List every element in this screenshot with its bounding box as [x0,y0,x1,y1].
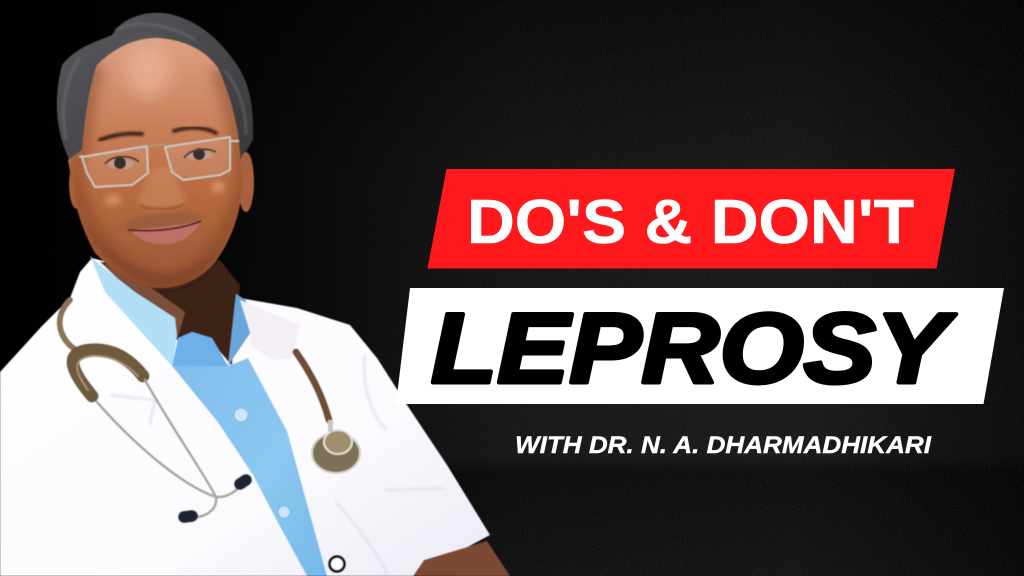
shirt collar left [90,256,177,366]
presenter credit: WITH DR. N. A. DHARMADHIKARI [515,432,932,459]
ear tip lower [184,516,192,517]
mouth [128,221,201,244]
face edge shading [76,65,243,288]
shirt button upper [234,408,248,422]
forearm [413,541,510,576]
hair [57,13,253,165]
eyebrows [100,128,216,140]
tubing right [296,352,329,420]
white lab coat [0,258,490,576]
face [68,38,243,288]
neck [100,260,240,366]
hair streaks [63,24,246,140]
coat button [330,556,344,572]
shirt placket [172,340,327,576]
eyes [105,148,216,169]
forehead highlight [126,46,170,98]
coat shadows [110,355,445,576]
shirt button lower [278,506,290,518]
tubing left [60,300,76,350]
mustache shadow [122,212,205,232]
red banner [428,169,955,268]
cheek highlights [105,181,225,206]
white banner [396,288,1004,404]
ear left [69,161,85,209]
nose [138,165,186,210]
stethoscope chest piece [312,420,360,473]
glasses [79,137,239,187]
shirt collar right [228,294,251,366]
nose base [140,204,184,209]
heading: leprosy: LEPROSY [431,292,957,404]
ear right [238,152,254,212]
ear tip upper [240,480,246,484]
doctor portrait [0,13,510,576]
stethoscope [60,300,329,517]
shirt collar under fold [172,332,228,366]
heading: do's and don't: DO'S & DON'T [467,188,914,257]
chin shadow [80,215,235,286]
background: dark chalkboard [254,0,1024,576]
metal binaurals [97,402,242,497]
coat lapel right [240,300,300,360]
